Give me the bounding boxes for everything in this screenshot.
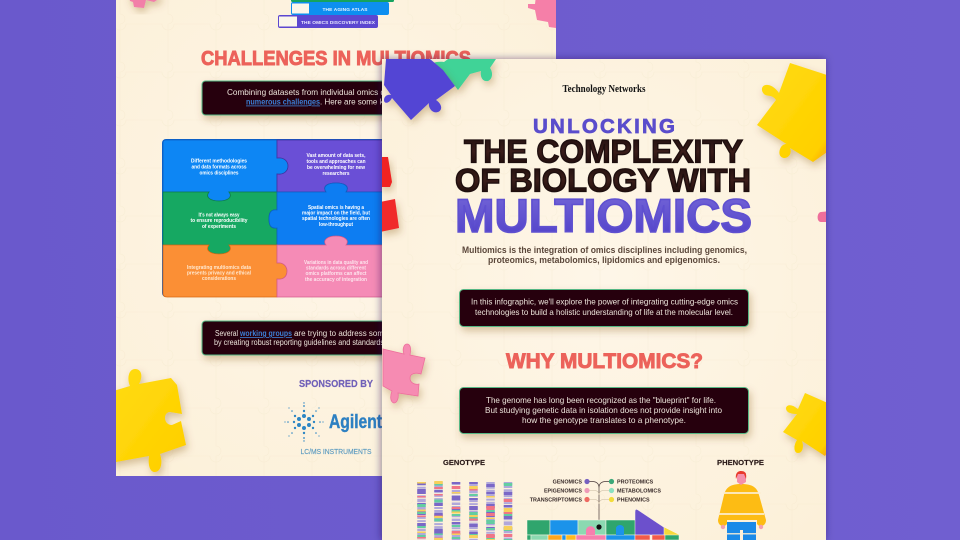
icon: yellow puzzle right [783,393,830,456]
piece: blue methodologies: omics disciplines [200,170,238,176]
diagram: omics legend: GENOMICS [553,480,582,486]
heading: sponsored by: SPONSORED BY [299,379,373,390]
heading: why multiomics: WHY MULTIOMICS? [506,350,703,373]
label: the aging atlas: THE AGING ATLAS [322,7,368,13]
callout: genome blueprint: The genome has long been recognized as the "blueprint" for life. [486,396,716,405]
diagram: omics legend [530,478,661,520]
text block: definition: Multiomics is the integration of omics disciplines including genomics, [462,245,747,255]
icon: red puzzle piece lower [380,199,399,232]
icon: pink puzzle top right [528,0,556,28]
piece: purple data sets: Vast amount of data sets, [306,153,366,159]
diagram: omics legend: EPIGENOMICS [544,488,582,494]
title: MULTIOMICS [455,189,752,242]
diagram: omics legend: TRANSCRIPTOMICS [530,498,582,504]
callout: intro: technologies to build a holistic understanding of life at the molecular level. [475,308,733,317]
piece: green reproducibility [163,192,277,254]
callout: combining datasets [199,80,382,124]
icon: pink puzzle top left [128,0,160,8]
label: lc/ms instruments: LC/MS INSTRUMENTS [300,447,372,456]
piece: purple data sets: tools and approaches can [306,159,366,165]
diagram: omics legend: METABOLOMICS [617,488,661,494]
heading: challenges in multiomics: CHALLENGES IN MULTIOMICS [201,48,471,70]
callout: working groups: Several [215,329,238,338]
piece: green reproducibility: It's not always easy [198,212,240,218]
title: UNLOCKING [533,115,675,138]
icon: green puzzle top [430,59,496,90]
piece: pink variations: omics platforms can affect [306,271,367,277]
piece: pink variations: the accuracy of integration [305,277,367,283]
icon: yellow puzzle bottom left [110,369,186,472]
piece: purple data sets [277,140,392,192]
piece: blue spatial omics: spatial technologies are often [302,216,370,222]
callout: working groups: are trying to address some of these [294,329,420,338]
piece: blue methodologies: and data formats across [192,164,246,170]
callout: working groups [199,320,382,364]
piece: blue methodologies [163,140,288,201]
piece: purple data sets: researchers [322,171,350,177]
icon: red puzzle piece upper [380,157,392,187]
piece: pink variations [277,236,392,297]
illustration: person phenotype [718,471,766,540]
piece: green reproducibility: to ensure reproducibility [190,218,248,224]
piece: pink variations: standards across different [306,266,366,272]
jigsaw: challenges grid [162,139,392,297]
callout: genome blueprint [460,388,748,434]
title: OF BIOLOGY WITH [455,162,751,198]
logo: technology networks: Technology Networks [562,84,646,95]
callout: intro: In this infographic, we'll explore the power of integrating cutting-edge omics [471,298,738,306]
heading: genotype: GENOTYPE [443,458,485,467]
diagram: omics legend: PROTEOMICS [617,480,654,486]
title: THE COMPLEXITY [464,134,743,170]
callout: genome blueprint: But studying genetic data in isolation does not provide insight into [485,406,722,415]
logo: agilent wordmark: Agilent [329,412,383,433]
chart: dna barcode strips [422,481,508,540]
icon: agilent spark logo [284,402,324,442]
piece: pink variations: Variations in data quality and [304,260,368,266]
callout: combining datasets: numerous challenges [246,98,320,106]
callout: working groups: working groups [239,329,292,338]
icon: pink puzzle left [383,344,425,403]
text block: definition [462,245,747,265]
panel: back page challenges [110,0,556,476]
callout: combining datasets: Combining datasets from individual omics disciplines presents [227,88,452,97]
icon: purple puzzle top left [384,59,455,120]
diagram: puzzle arrow [527,509,680,540]
callout: genome blueprint: how the genotype translates to a phenotype. [522,416,686,425]
text block: definition: proteomics, metabolomics, lipidomics and epigenomics. [488,255,720,265]
title [455,115,752,242]
piece: blue spatial omics: major impact on the field, but [302,210,370,216]
piece: orange integrating: presents privacy and ethical [187,270,251,276]
book stack [278,0,394,28]
panel: front page cover [380,59,830,540]
piece: orange integrating: Integrating multiomics data [187,265,252,271]
callout: intro [460,290,748,326]
piece: blue spatial omics: Spatial omics is having a [308,205,365,211]
piece: blue methodologies: Different methodologies [191,158,247,164]
callout: working groups: by creating robust reporting guidelines and standards. [214,338,386,347]
heading: phenotype: PHENOTYPE [717,458,764,467]
label: the omics discovery index: THE OMICS DISCOVERY INDEX [301,20,376,26]
piece: blue spatial omics: low-throughput [319,222,353,228]
callout: combining datasets: . Here are some key ones: [320,98,414,106]
icon: pink puzzle edge right [818,212,826,222]
diagram: omics legend: PHENOMICS [617,498,650,504]
piece: orange integrating: considerations [202,276,236,282]
piece: blue spatial omics [269,183,392,245]
piece: green reproducibility: of experiments [202,224,236,230]
icon: yellow puzzle top right [757,63,830,162]
piece: orange integrating [163,245,287,297]
piece: purple data sets: be overwhelming for new [307,165,366,171]
